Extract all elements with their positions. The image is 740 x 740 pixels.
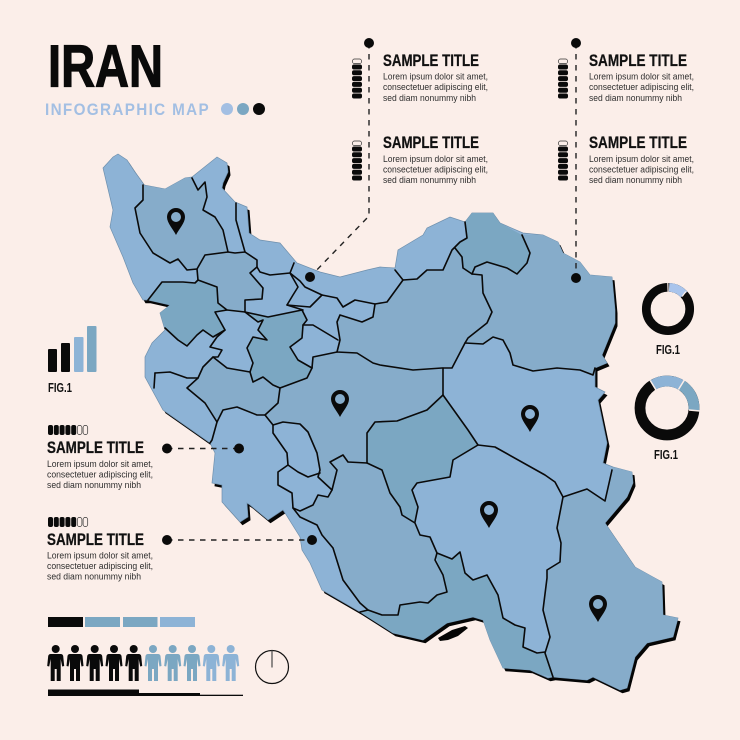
icon: clock dial — [256, 650, 288, 684]
leader line top left callout — [305, 38, 374, 282]
callout: left one: consectetuer adipiscing elit, — [47, 470, 153, 480]
meter: left one — [48, 425, 88, 435]
icon: map pin centre — [331, 390, 349, 417]
callout: left one: SAMPLE TITLE — [47, 439, 144, 457]
callout: top centre one: consectetuer adipiscing elit, — [383, 82, 488, 93]
meter: top centre one — [352, 59, 362, 98]
meter: top right two — [558, 141, 568, 180]
donut chart large — [640, 380, 700, 435]
callout: top right two: sed diam nonummy nibh — [589, 175, 682, 186]
people pictogram — [47, 645, 239, 681]
subtitle: INFOGRAPHIC MAP — [45, 100, 210, 119]
donut chart small — [646, 283, 690, 331]
map of Iran — [103, 154, 680, 693]
callout: top right two — [589, 134, 694, 186]
callout: top centre one: Lorem ipsum dolor sit amet, — [383, 72, 488, 82]
callout: top right one: SAMPLE TITLE — [589, 52, 687, 70]
callout: top centre two: Lorem ipsum dolor sit amet, — [383, 154, 488, 165]
segmented bar — [48, 617, 195, 627]
callout: top centre two: sed diam nonummy nibh — [383, 175, 476, 186]
callout: top centre two — [383, 134, 488, 186]
callout: top centre two: SAMPLE TITLE — [383, 134, 479, 152]
callout: top right two: SAMPLE TITLE — [589, 134, 687, 152]
callout: left two — [47, 531, 153, 582]
callout: top right one — [589, 52, 694, 104]
icon: map pin northwest — [167, 208, 185, 235]
callout: top centre one: SAMPLE TITLE — [383, 52, 479, 70]
legend dots — [221, 103, 265, 115]
stepped rule — [48, 690, 243, 696]
darker provinces — [135, 177, 678, 690]
callout: top centre one — [383, 52, 488, 104]
callout: left two: SAMPLE TITLE — [47, 531, 144, 549]
meter: top centre two — [352, 141, 362, 180]
callout: left two: consectetuer adipiscing elit, — [47, 561, 153, 572]
island — [438, 626, 468, 641]
callout: top centre two: consectetuer adipiscing elit, — [383, 164, 488, 176]
callout: top right one: consectetuer adipiscing elit, — [589, 82, 694, 93]
map shadow — [106, 157, 680, 693]
callout: top right two: Lorem ipsum dolor sit amet, — [589, 154, 694, 165]
province borders — [135, 178, 612, 677]
leader line left callout one — [162, 444, 244, 454]
callout: left two: sed diam nonummy nibh — [47, 572, 141, 582]
callout: left two: Lorem ipsum dolor sit amet, — [47, 550, 153, 562]
meter: top right one — [558, 59, 568, 98]
bar chart — [48, 326, 96, 372]
icon: map pin east — [521, 405, 539, 432]
donut label small: FIG.1 — [656, 342, 680, 357]
title: IRAN — [48, 34, 163, 100]
callout: top right one: sed diam nonummy nibh — [589, 93, 682, 104]
callout: top centre one: sed diam nonummy nibh — [383, 93, 476, 104]
donut label large: FIG.1 — [654, 447, 678, 462]
callout: top right two: consectetuer adipiscing elit, — [589, 164, 694, 176]
bar chart label: FIG.1 — [48, 380, 72, 395]
callout: left one — [47, 439, 153, 491]
leader line top right callout — [571, 38, 581, 283]
leader line left callout two — [162, 535, 317, 545]
icon: map pin south — [480, 501, 498, 528]
map base light provinces — [103, 154, 678, 690]
meter: left two — [48, 517, 88, 527]
callout: left one: Lorem ipsum dolor sit amet, — [47, 459, 153, 470]
callout: top right one: Lorem ipsum dolor sit amet, — [589, 72, 694, 82]
icon: map pin southeast — [589, 595, 607, 622]
callout: left one: sed diam nonummy nibh — [47, 480, 141, 491]
